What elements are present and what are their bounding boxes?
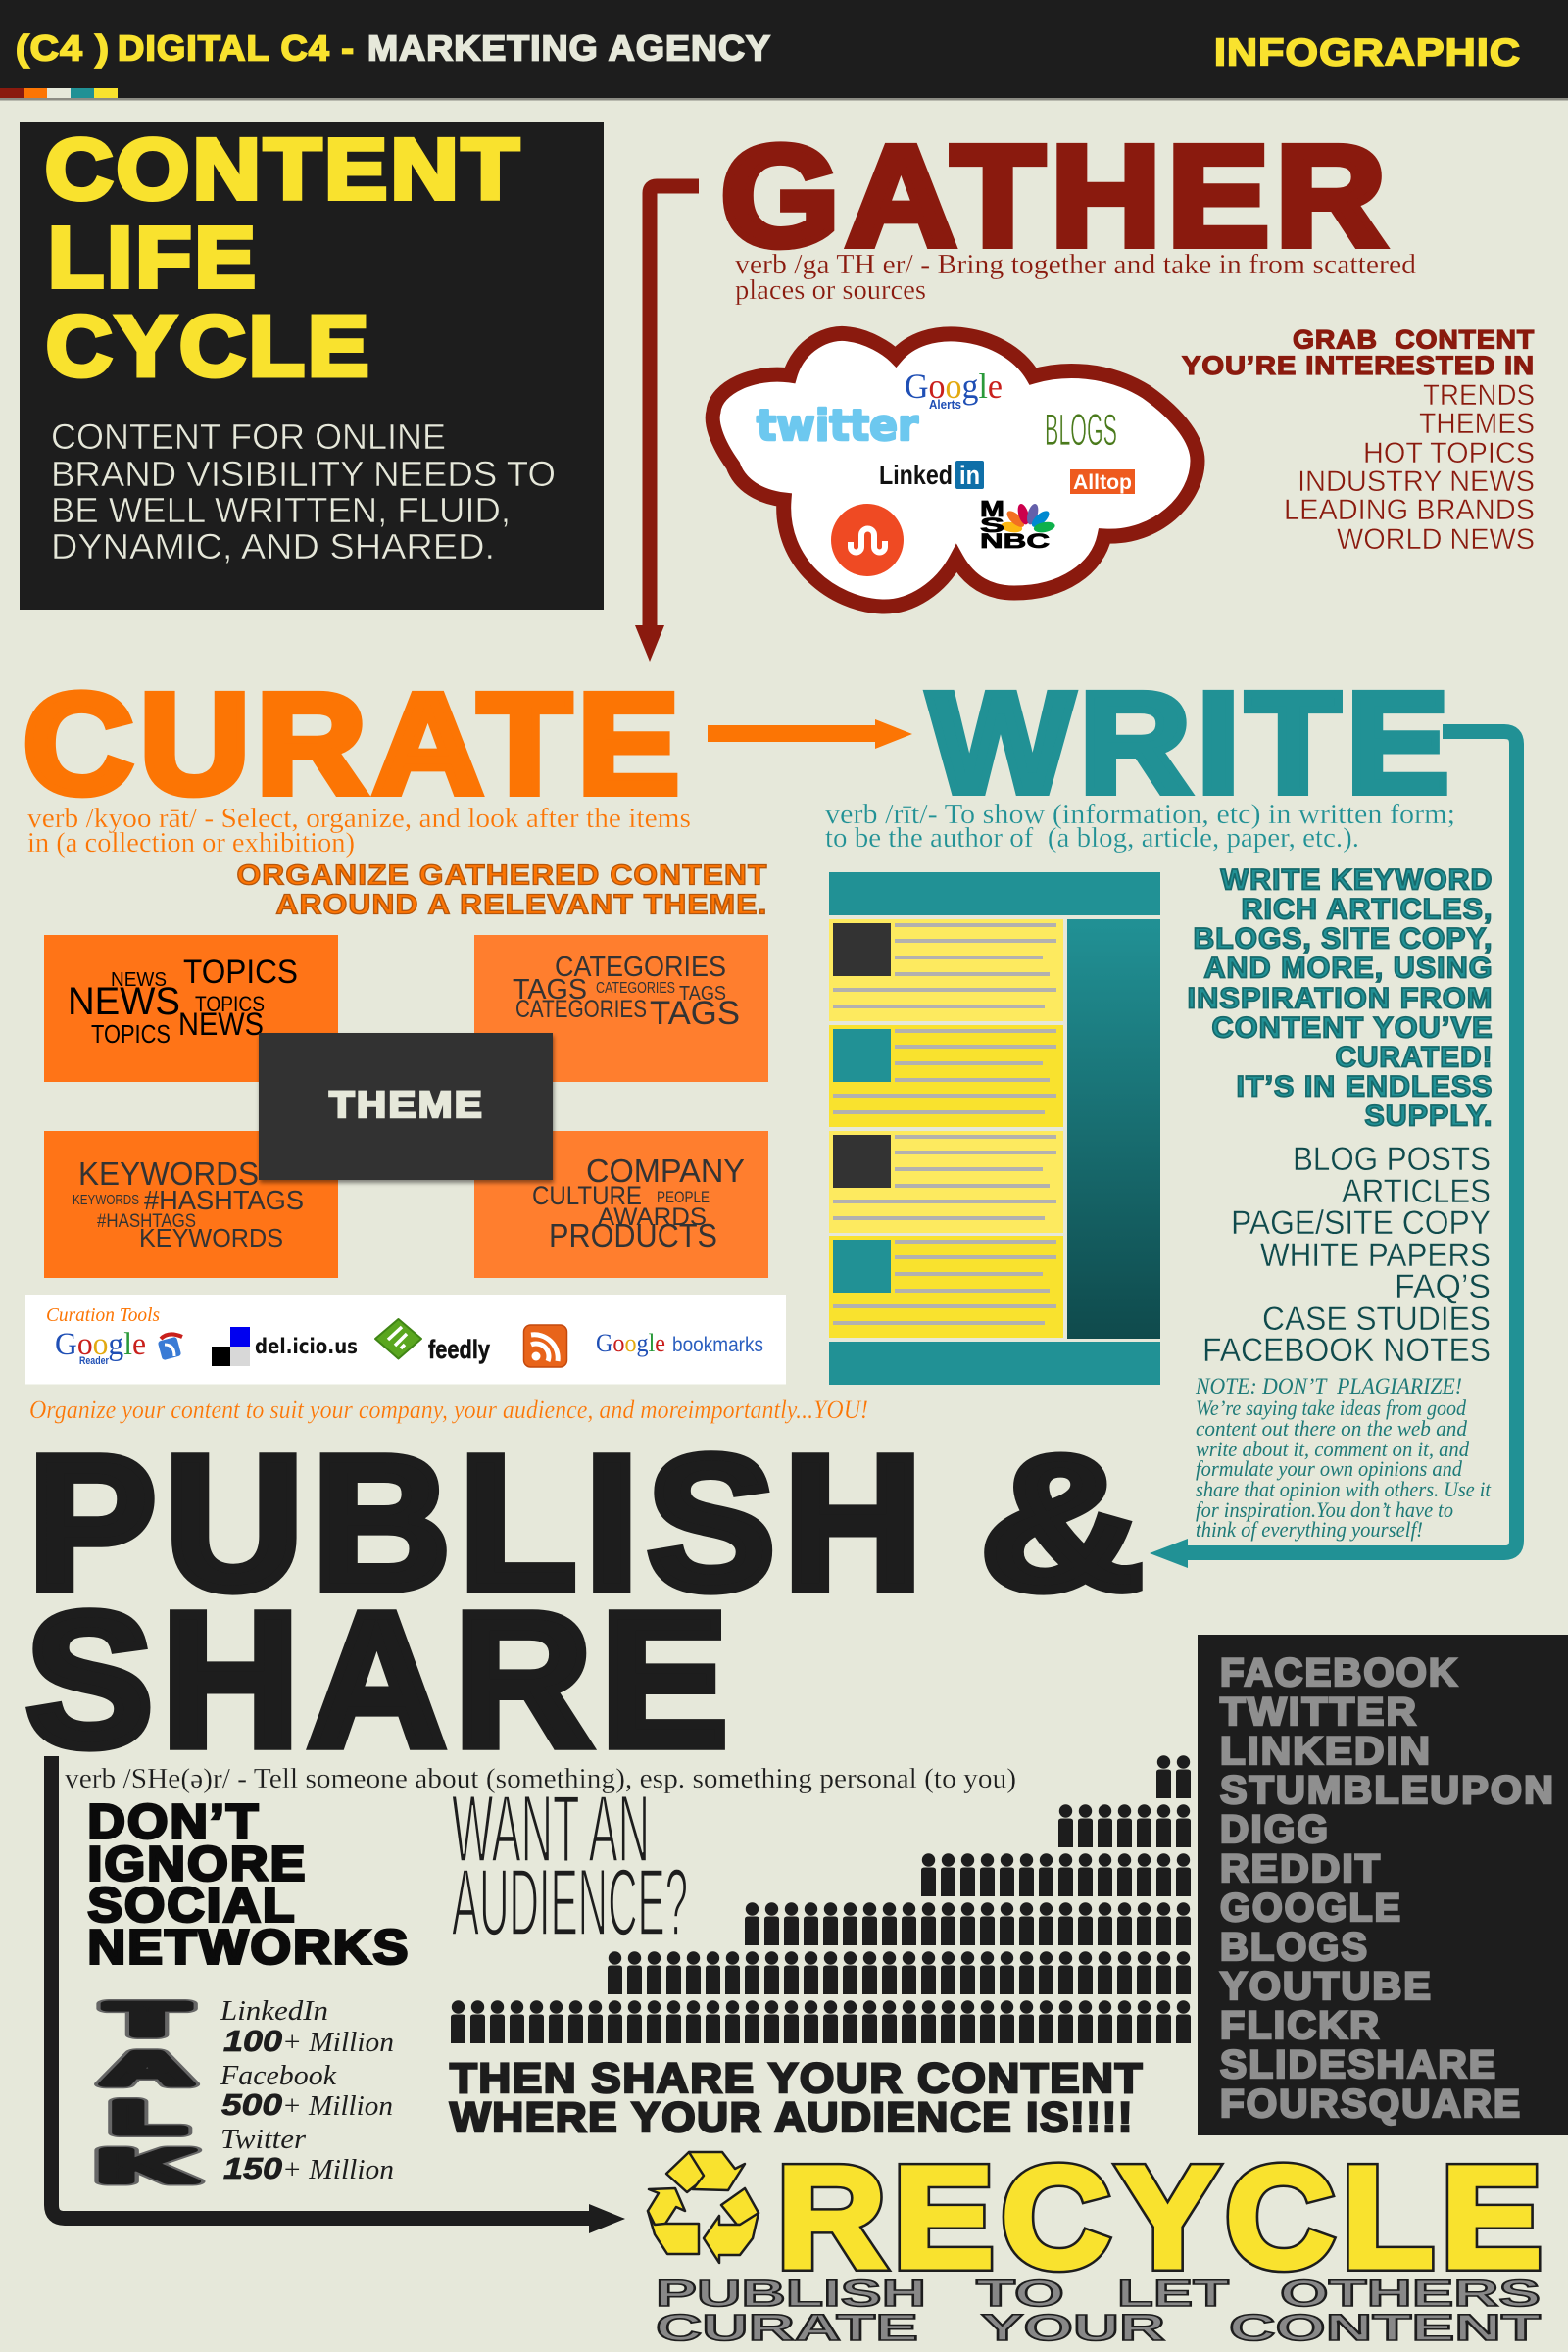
panel: social network list: GOOGLE: [1220, 1886, 1402, 1930]
header agency name: [16, 27, 771, 69]
panel: word cloud news and topics: [44, 935, 338, 1082]
panel: word cloud news and topics: NEWS: [111, 969, 167, 991]
logo: google bookmarks: Google: [596, 1329, 665, 1357]
vertical word: talk: L: [112, 2091, 184, 2142]
definition: curate: in (a collection or exhibition): [27, 828, 355, 858]
text block: grab content: YOU’RE INTERESTED IN: [1182, 351, 1535, 380]
definition: curate: [27, 804, 691, 858]
cloud of content sources: BLOGS: [1045, 405, 1117, 455]
stats: network sizes: LinkedIn: [220, 1995, 328, 2027]
article row 4: [829, 1236, 1063, 1338]
text block: write keyword rich articles: WRITE KEYWORD: [1221, 864, 1494, 896]
text block: write keyword rich articles: BLOGS, SITE COPY,: [1194, 923, 1494, 955]
vertical word: talk: A: [103, 2042, 191, 2093]
vertical word: talk: K: [98, 2140, 195, 2191]
text block: write keyword rich articles: SUPPLY.: [1364, 1100, 1494, 1133]
heading: publish & share: PUBLISH: [28, 1417, 931, 1630]
logo: msnbc: NBC: [980, 530, 1050, 553]
panel: social network list: REDDIT: [1220, 1847, 1382, 1890]
intro text: CONTENT FOR ONLINE: [51, 416, 446, 457]
vertical word: talk: T: [108, 1993, 186, 2044]
text block: grab content: [1182, 325, 1535, 556]
definition: write: verb /rīt/- To show (information, etc) in written form;: [825, 800, 1455, 830]
definition: curate: verb /kyoo rāt/ - Select, organize, and look after the items: [27, 804, 691, 834]
definition: write: to be the author of (a blog, article, paper, etc.).: [825, 823, 1359, 854]
intro text: DYNAMIC, AND SHARED.: [51, 526, 495, 566]
header bar: [0, 0, 1568, 100]
logo: twitter: twitter: [757, 401, 918, 451]
text block: write keyword rich articles: AND MORE, USING: [1203, 953, 1494, 984]
arrow: share to recycle: [51, 1756, 625, 2233]
text block: don't ignore social networks: NETWORKS: [88, 1921, 410, 1974]
header agency name: (C4 ): [16, 27, 110, 69]
list: content types: [1202, 1141, 1491, 1369]
panel: word cloud news and topics: TOPICS: [195, 992, 265, 1016]
note: don't plagiarize: for inspiration.You don’t have to: [1196, 1497, 1453, 1522]
text block: grab content: THEMES: [1419, 408, 1535, 440]
caption: organize your content: Organize your content to suit your company, your audience, and moreimportantly...YOU!: [29, 1396, 868, 1424]
intro text: [51, 416, 556, 566]
text: AUDIENCE?: [452, 1848, 688, 1956]
subheading: organize: AROUND A RELEVANT THEME.: [276, 890, 768, 921]
heading: want an audience: [452, 1776, 688, 1956]
text block: grab content: GRAB CONTENT: [1293, 325, 1535, 355]
text block: grab content: WORLD NEWS: [1337, 523, 1535, 556]
text block: write keyword rich articles: CURATED!: [1335, 1041, 1494, 1074]
panel: word cloud categories and tags: [474, 935, 768, 1082]
panel: curation tools: [25, 1295, 786, 1384]
title: [45, 122, 522, 394]
panel: social network list: SLIDESHARE: [1220, 2043, 1497, 2086]
panel: theme: [259, 1033, 553, 1180]
panel: word cloud categories and tags: CATEGORIES: [596, 980, 675, 997]
tagline: publish to let others curate your content: TO: [976, 2274, 1064, 2315]
logo: alltop: Alltop: [1073, 471, 1132, 494]
stats: network sizes: 150: [223, 2151, 282, 2185]
tagline: publish to let others curate your content: PUBLISH: [656, 2274, 926, 2315]
stats: network sizes: 100: [223, 2024, 282, 2058]
note: don't plagiarize: share that opinion with others. Use it: [1196, 1477, 1492, 1501]
note: don't plagiarize: formulate your own opinions and: [1196, 1456, 1463, 1481]
text block: don't ignore social networks: DON’T: [88, 1795, 261, 1848]
text block: write keyword rich articles: INSPIRATION FROM: [1188, 982, 1494, 1015]
logo: delicious: [212, 1327, 358, 1366]
definition: write: [825, 800, 1455, 854]
tagline: publish to let others curate your content: YOUR: [981, 2308, 1165, 2349]
tagline: publish to let others curate your content: CURATE: [656, 2308, 918, 2349]
text block: grab content: INDUSTRY NEWS: [1298, 466, 1535, 498]
header agency name: MARKETING AGENCY: [368, 27, 771, 69]
panel: word cloud categories and tags: TAGS: [513, 974, 587, 1005]
heading: gather: GATHER: [721, 116, 1392, 275]
panel: word cloud categories and tags: CATEGORIES: [515, 996, 647, 1023]
heading: write: WRITE: [928, 662, 1455, 822]
text block: write keyword rich articles: RICH ARTICLES,: [1241, 894, 1494, 925]
panel: social network list: BLOGS: [1220, 1926, 1369, 1969]
intro text: BRAND VISIBILITY NEEDS TO: [51, 454, 556, 494]
heading: curate: CURATE: [24, 663, 686, 823]
tagline: publish to let others curate your content: CONTENT: [1229, 2308, 1541, 2349]
text block: don't ignore social networks: [88, 1795, 410, 1974]
stats: network sizes: + Million: [282, 2090, 393, 2122]
panel: word cloud news and topics: NEWS: [68, 980, 180, 1023]
panel: social network list: LINKEDIN: [1220, 1730, 1432, 1773]
header infographic label: INFOGRAPHIC: [1214, 31, 1521, 74]
article row 3: [829, 1131, 1063, 1233]
panel: word cloud company: [474, 1131, 768, 1278]
panel: word cloud company: CULTURE: [532, 1181, 642, 1210]
panel: word cloud categories and tags: CATEGORIES: [555, 952, 726, 983]
logo: msnbc: S: [980, 514, 1004, 537]
logo: feedly: [375, 1319, 490, 1364]
intro text: BE WELL WRITTEN, FLUID,: [51, 490, 511, 530]
article row 2: [829, 1025, 1063, 1127]
definition: share: verb /SHe(ə)r/ - Tell someone about (something), esp. something personal (to you): [65, 1764, 1016, 1794]
list: content types: ARTICLES: [1342, 1173, 1491, 1210]
panel: word cloud company: PRODUCTS: [549, 1217, 717, 1253]
colour swatches: [0, 88, 118, 98]
title: CYCLE: [46, 299, 372, 394]
logo: delicious: del.icio.us: [255, 1335, 358, 1358]
note: don't plagiarize: content out there on the web and: [1196, 1416, 1468, 1441]
article row 1: [829, 919, 1063, 1021]
panel: word cloud keywords and hashtags: KEYWORDS: [73, 1192, 139, 1208]
vertical word: talk: T: [108, 1993, 186, 2044]
icon: rss feed: [523, 1325, 566, 1367]
panel: word cloud keywords and hashtags: #HASHTAGS: [97, 1211, 196, 1232]
panel: word cloud categories and tags: TAGS: [679, 983, 726, 1004]
definition: gather: verb /ga TH er/ - Bring together and take in from scattered: [735, 250, 1416, 280]
panel: content life cycle intro: [20, 122, 604, 610]
panel: word cloud company: COMPANY: [586, 1152, 745, 1189]
panel: word cloud categories and tags: TAGS: [650, 995, 740, 1032]
text block: grab content: HOT TOPICS: [1363, 437, 1535, 469]
logo: google reader: Google: [55, 1327, 146, 1362]
logo: feedly: feedly: [428, 1335, 490, 1364]
arrow: write to publish: [1150, 731, 1517, 1568]
note: don't plagiarize: NOTE: DON’T PLAGIARIZE!: [1195, 1374, 1462, 1398]
logo: google reader: [55, 1327, 182, 1367]
tagline: publish to let others curate your content: OTHERS: [1280, 2274, 1541, 2315]
text block: don't ignore social networks: SOCIAL: [88, 1880, 296, 1933]
definition: gather: [735, 250, 1416, 306]
vertical word: talk: K: [98, 2140, 195, 2191]
logo: google bookmarks: [596, 1329, 763, 1357]
note: don't plagiarize: [1195, 1374, 1492, 1542]
text block: write keyword rich articles: CONTENT YOU’VE: [1211, 1011, 1494, 1045]
text block: write keyword rich articles: IT’S IN ENDLESS: [1237, 1070, 1494, 1103]
panel: word cloud news and topics: TOPICS: [183, 954, 298, 991]
panel: word cloud news and topics: NEWS: [178, 1006, 264, 1042]
title: CONTENT: [45, 122, 522, 218]
panel: social network list: TWITTER: [1220, 1690, 1418, 1734]
title: LIFE: [48, 210, 259, 306]
text block: then share your content: THEN SHARE YOUR CONTENT: [450, 2055, 1144, 2102]
panel: social network list: [1198, 1635, 1568, 2135]
note: don't plagiarize: write about it, comment on it, and: [1196, 1437, 1470, 1461]
panel: word cloud company: AWARDS: [598, 1203, 707, 1231]
panel: word cloud keywords and hashtags: KEYWORDS: [139, 1223, 283, 1252]
vertical word: talk: [98, 1993, 195, 2191]
stats: network sizes: 500: [221, 2087, 282, 2122]
list: content types: PAGE/SITE COPY: [1231, 1204, 1491, 1242]
text block: then share your content: WHERE YOUR AUDIENCE IS!!!!: [450, 2094, 1134, 2141]
header agency name: DIGITAL C4 -: [118, 27, 355, 69]
heading: want an audience: WANT AN: [452, 1776, 650, 1882]
cloud of content sources: [712, 333, 1198, 607]
heading: recycle: RECYCLE: [777, 2137, 1549, 2298]
heading: publish & share: &: [980, 1417, 1144, 1630]
heading: publish & share: [25, 1417, 1144, 1787]
text block: write keyword rich articles: [1188, 864, 1494, 1133]
text block: grab content: TRENDS: [1423, 379, 1535, 412]
heading: recycle: RECYCLE: [777, 2137, 1549, 2298]
vertical word: talk: A: [103, 2042, 191, 2093]
panel: word cloud keywords and hashtags: KEYWORDS: [78, 1155, 259, 1192]
arrow: curate to write: [708, 719, 912, 749]
note: don't plagiarize: think of everything yourself!: [1196, 1517, 1423, 1542]
subheading: organize: ORGANIZE GATHERED CONTENT: [237, 860, 768, 892]
list: content types: FAQ’S: [1395, 1268, 1491, 1305]
panel: social network list: FLICKR: [1220, 2004, 1381, 2047]
subheading: organize: [237, 860, 768, 921]
logo: stumbleupon: [831, 504, 904, 576]
stats: network sizes: + Million: [282, 2027, 394, 2058]
panel: word cloud company: PEOPLE: [657, 1188, 710, 1206]
website mockup: [829, 872, 1160, 1385]
arrow: gather to curate: [635, 186, 699, 662]
stats: network sizes: Facebook: [220, 2060, 337, 2091]
panel: social network list: STUMBLEUPON: [1220, 1769, 1555, 1812]
icon: recycle symbol: [648, 2152, 759, 2263]
text block: don't ignore social networks: IGNORE: [88, 1838, 308, 1891]
panel: social network list: FOURSQUARE: [1220, 2082, 1522, 2126]
text block: then share your content: [450, 2055, 1144, 2141]
list: content types: FACEBOOK NOTES: [1202, 1332, 1491, 1369]
definition: gather: places or sources: [735, 275, 926, 306]
logo: google alerts: Google: [905, 367, 1003, 406]
tagline: publish to let others curate your content: LET: [1117, 2274, 1229, 2315]
note: don't plagiarize: We’re saying take ideas from good: [1196, 1396, 1467, 1420]
logo: msnbc: [980, 496, 1055, 553]
panel: theme: THEME: [329, 1085, 484, 1126]
stats: network sizes: + Million: [282, 2154, 394, 2185]
panel: social network list: FACEBOOK: [1220, 1651, 1459, 1694]
panel: word cloud news and topics: TOPICS: [91, 1019, 171, 1049]
tagline: publish to let others curate your content: [656, 2274, 1541, 2349]
list: content types: WHITE PAPERS: [1260, 1237, 1491, 1274]
panel: word cloud keywords and hashtags: #HASHTAGS: [144, 1185, 304, 1215]
logo: linkedin: Linked: [879, 460, 953, 490]
chart: growing audience of people icons: [451, 1755, 1196, 2043]
list: content types: BLOG POSTS: [1293, 1141, 1491, 1178]
stats: network sizes: [220, 1995, 394, 2185]
logo: google bookmarks: bookmarks: [672, 1334, 763, 1356]
heading: publish & share: SHARE: [25, 1574, 737, 1787]
label: curation tools: Curation Tools: [46, 1304, 160, 1326]
logo: linkedin: in: [959, 461, 980, 490]
logo: google alerts: Alerts: [929, 397, 961, 412]
vertical word: talk: L: [112, 2091, 184, 2142]
logo: google reader: Reader: [79, 1355, 110, 1367]
panel: social network list: DIGG: [1220, 1808, 1330, 1851]
stats: network sizes: Twitter: [220, 2124, 307, 2155]
text block: grab content: LEADING BRANDS: [1284, 494, 1535, 526]
panel: word cloud keywords and hashtags: [44, 1131, 338, 1278]
logo: msnbc: M: [980, 496, 1004, 521]
list: content types: CASE STUDIES: [1262, 1300, 1491, 1338]
panel: social network list: YOUTUBE: [1220, 1965, 1433, 2008]
